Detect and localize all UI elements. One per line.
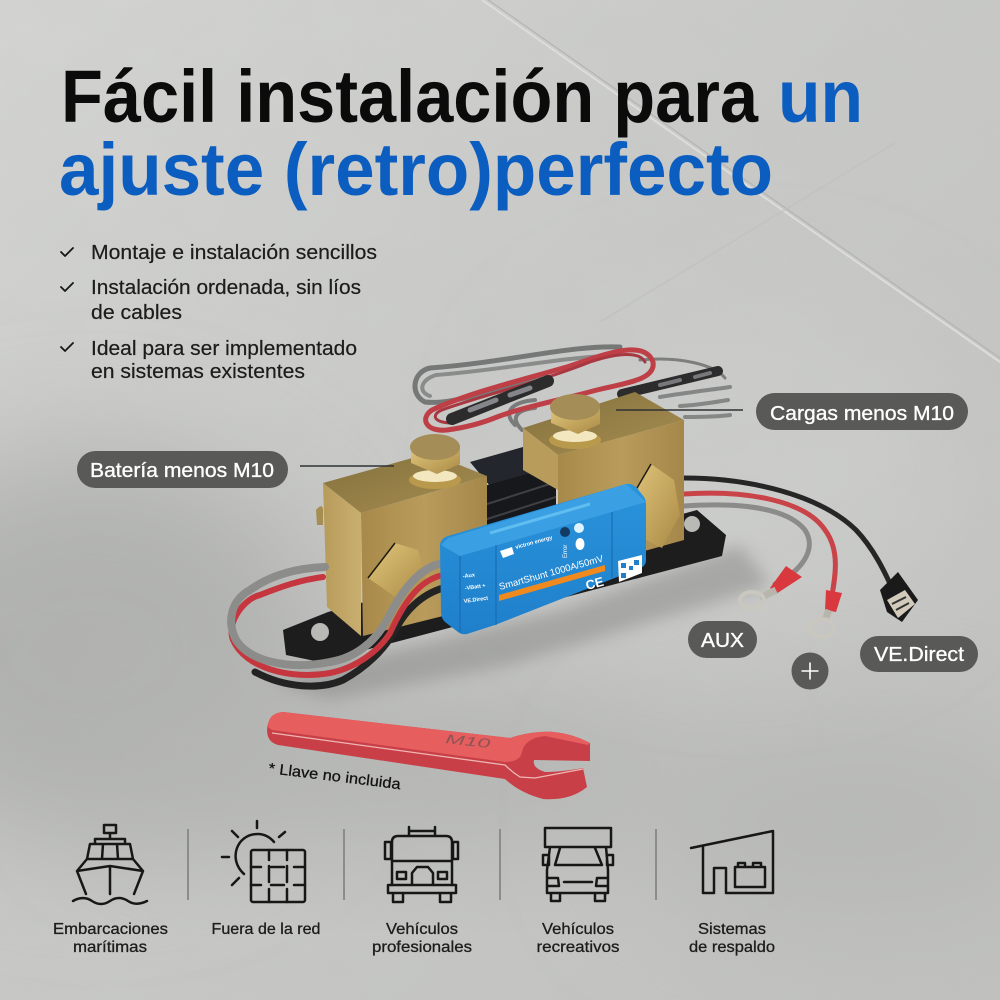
divider [343,829,345,900]
feature checklist: Montaje e instalación sencillos [91,242,377,264]
footnote: wrench not included: * Llave no incluida [268,760,402,793]
icon: boat [73,825,147,904]
title: un [778,55,863,138]
module front label: VE.Direct [463,596,489,605]
callout: battery minus M10: Batería menos M10 [90,459,274,482]
callout: loads minus M10: Cargas menos M10 [770,402,954,425]
module front label: SmartShunt 1000A/50mV [498,553,605,593]
blue SmartShunt module [440,484,646,634]
callout: AUX [688,621,757,658]
icon: recreational vehicle [543,828,613,901]
icon: backup systems building [691,831,773,893]
caption: professional vehicles [372,921,472,956]
caption: marine vessels: Embarcaciones [53,921,168,938]
module front label: CE [584,574,606,593]
title: ajuste (retro)perfecto [59,128,773,211]
caption: marine vessels [53,921,168,956]
divider [187,829,189,900]
feature checklist: Ideal para ser implementado [91,338,357,360]
callout: VE.Direct [860,636,978,672]
divider [499,829,501,900]
product shadow [270,545,770,700]
module front label [462,523,642,605]
callout: plus [792,652,828,690]
title [59,55,863,211]
feature checklist: en sistemas existentes [91,361,305,383]
module front label: -VBatt + [464,583,486,592]
divider [655,829,657,900]
caption: recreational vehicles: Vehículos [542,921,614,938]
caption: marine vessels: marítimas [73,939,147,956]
callout: battery minus M10 [77,451,394,488]
left brass block [316,434,487,636]
right brass block [523,392,684,575]
caption: recreational vehicles [536,921,620,956]
callout: VE.Direct: VE.Direct [874,643,964,666]
caption: professional vehicles: profesionales [372,939,472,956]
caption: professional vehicles: Vehículos [386,921,458,938]
VE.Direct connector [880,572,918,622]
feature checklist [61,242,377,383]
module front label: Error [563,545,569,558]
feature checklist: Instalación ordenada, sin líos [91,277,361,299]
callout: AUX: AUX [701,629,744,652]
icon: professional truck [385,827,458,902]
gray ring terminal [740,566,802,608]
base plate [283,510,726,662]
title: Fácil instalación para [61,55,759,138]
module front label: victron energy [515,535,554,551]
product: SmartShunt with cables [231,347,918,700]
wrench [267,712,590,799]
caption: backup systems [689,921,775,956]
callout: loads minus M10 [616,393,968,430]
icon: off-grid solar [222,821,305,902]
module front label: -Aux [462,572,476,580]
caption: off-grid: Fuera de la red [212,921,320,938]
loom cables from module [231,563,443,686]
coiled cables behind the shunt [415,347,730,430]
caption: recreational vehicles: recreativos [536,939,620,956]
shunt fins [470,443,557,552]
wrench: M10 [445,731,492,751]
right-hand cables to terminals [684,478,894,606]
feature checklist: de cables [91,302,182,324]
caption: backup systems: Sistemas [698,921,766,938]
caption: backup systems: de respaldo [689,939,775,956]
red ring terminal [810,590,842,637]
